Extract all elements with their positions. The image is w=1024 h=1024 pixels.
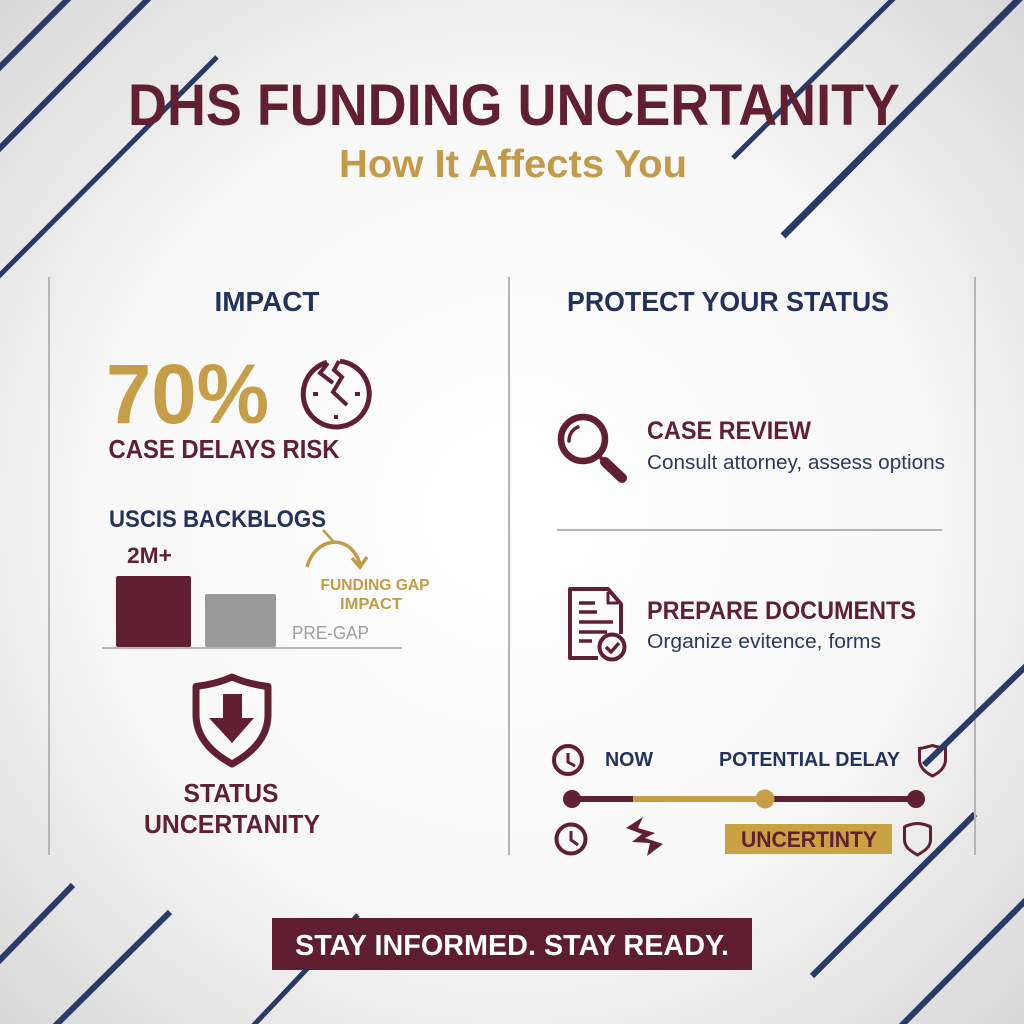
title: DHS FUNDING UNCERTANITY bbox=[128, 73, 900, 138]
icon: document with check bbox=[570, 589, 624, 660]
icon: lightning bbox=[626, 817, 663, 856]
timeline: POTENTIAL DELAY bbox=[719, 749, 901, 771]
item: prepare documents: PREPARE DOCUMENTS bbox=[647, 597, 916, 625]
label: status uncertainty bbox=[144, 778, 320, 839]
icon: clock top bbox=[554, 746, 582, 774]
item: case review: CASE REVIEW bbox=[647, 417, 811, 445]
label: case delays risk: CASE DELAYS RISK bbox=[108, 436, 340, 464]
arrow: funding gap bbox=[307, 530, 367, 567]
icon: magnifying glass bbox=[561, 417, 622, 478]
label: funding gap impact: IMPACT bbox=[340, 596, 402, 613]
item: case review: Consult attorney, assess options bbox=[647, 452, 945, 474]
icon: shield bottom bbox=[904, 824, 930, 855]
icon: cracked clock bbox=[303, 361, 369, 427]
label: funding gap impact bbox=[320, 577, 430, 613]
panel: protect your status bbox=[554, 286, 1024, 856]
timeline bbox=[554, 664, 1024, 856]
banner bbox=[272, 918, 752, 970]
panel: impact bbox=[102, 286, 430, 839]
item: case review bbox=[647, 417, 945, 474]
label: status uncertainty: UNCERTANITY bbox=[144, 809, 320, 839]
icon: shield with down arrow bbox=[196, 677, 268, 764]
item: prepare documents: Organize evitence, forms bbox=[647, 631, 881, 653]
heading: protect your status: PROTECT YOUR STATUS bbox=[567, 286, 889, 317]
banner: STAY INFORMED. STAY READY. bbox=[295, 930, 729, 962]
subtitle: How It Affects You bbox=[339, 143, 687, 186]
timeline: NOW bbox=[605, 749, 653, 771]
heading: impact: IMPACT bbox=[214, 286, 320, 317]
bar chart bbox=[102, 543, 402, 648]
stat: 70 percent: 70% bbox=[106, 347, 269, 441]
label: funding gap impact: FUNDING GAP bbox=[320, 577, 430, 594]
label: status uncertainty: STATUS bbox=[184, 778, 278, 808]
bar chart: 2M+ bbox=[127, 543, 172, 568]
icon: clock bottom bbox=[556, 824, 586, 854]
bar chart: PRE-GAP bbox=[292, 623, 369, 643]
item: prepare documents bbox=[647, 597, 916, 653]
tag: uncertainty: UNCERTINTY bbox=[741, 827, 877, 852]
icon: shield top bbox=[920, 746, 946, 776]
heading: uscis backlogs: USCIS BACKBLOGS bbox=[109, 506, 326, 533]
